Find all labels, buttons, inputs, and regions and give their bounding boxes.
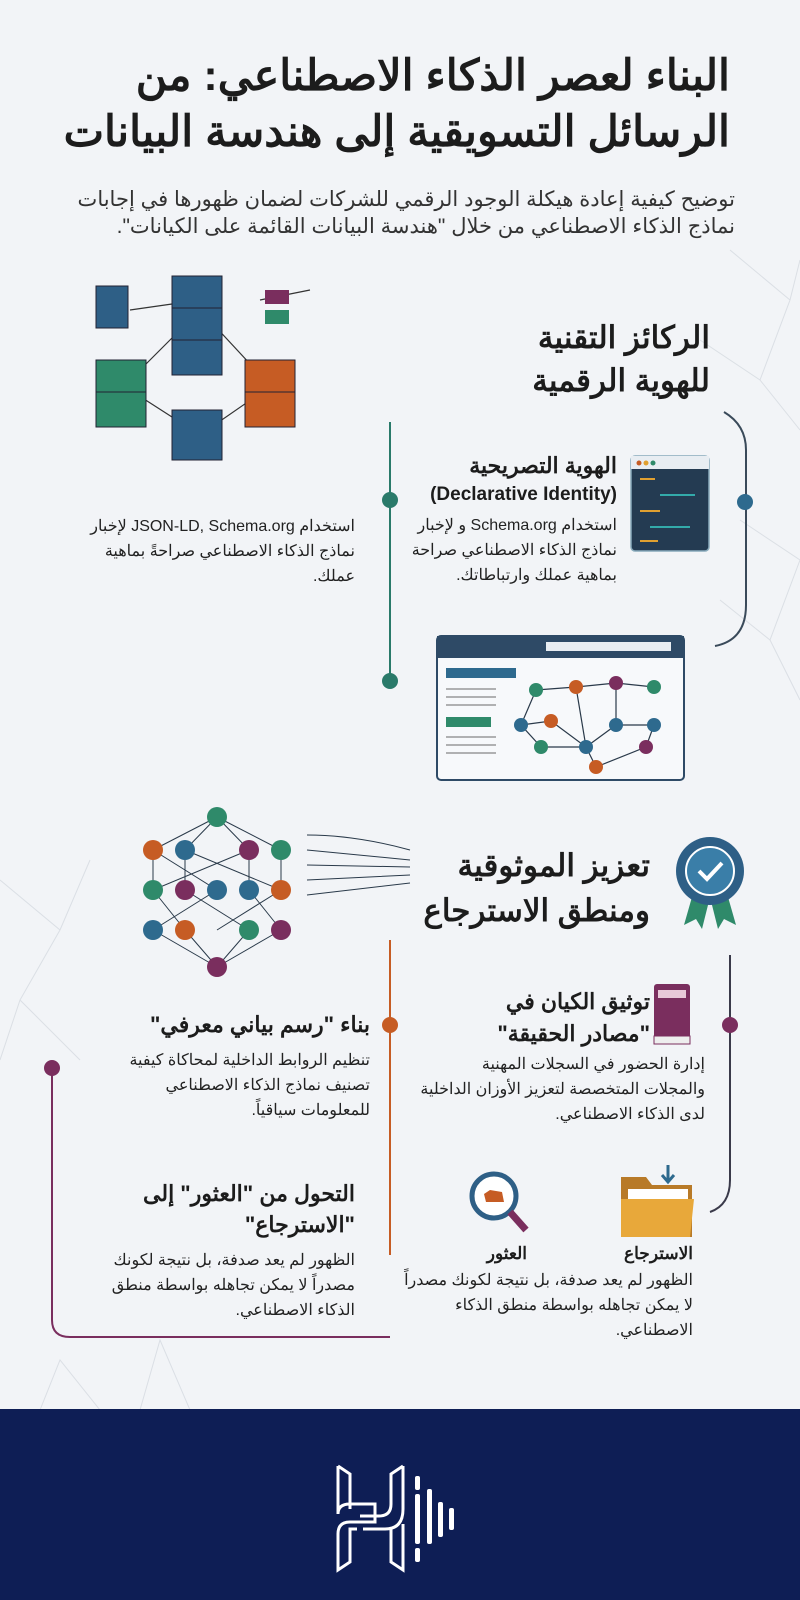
block: discovery to retrieval: التحول من "العثور" إلى bbox=[143, 1181, 355, 1206]
title: الرسائل التسويقية إلى هندسة البيانات bbox=[64, 108, 730, 156]
section 2 heading: ومنطق الاسترجاع bbox=[423, 893, 650, 928]
block: knowledge graph bbox=[129, 1012, 370, 1119]
footer band bbox=[0, 1409, 800, 1600]
icon: badge bbox=[676, 837, 744, 929]
label: retrieval: الاسترجاع bbox=[624, 1244, 693, 1263]
title bbox=[64, 52, 730, 158]
block: knowledge graph: تنظيم الروابط الداخلية لمحاكاة كيفية bbox=[129, 1052, 370, 1069]
text: retrieval body: الظهور لم يعد صدفة، بل نتيجة لكونك مصدراً bbox=[404, 1272, 693, 1289]
block: entity verification: "مصادر الحقيقة" bbox=[497, 1021, 650, 1046]
text block: left JSON-LD bbox=[90, 518, 355, 585]
block: discovery to retrieval bbox=[112, 1181, 355, 1319]
block: declarative identity: استخدام Schema.org و لإخبار bbox=[417, 517, 617, 534]
icon: book bbox=[654, 984, 690, 1044]
section 2 heading bbox=[423, 848, 650, 930]
subtitle: نماذج الذكاء الاصطناعي من خلال "هندسة البيانات القائمة على الكيانات". bbox=[117, 215, 735, 238]
icon: code window bbox=[630, 455, 710, 552]
illustration: browser knowledge graph bbox=[436, 635, 685, 781]
section 1 heading bbox=[532, 320, 710, 400]
logo bbox=[336, 1464, 454, 1573]
text: retrieval body: الاصطناعي. bbox=[616, 1322, 693, 1339]
illustration: server blocks bbox=[96, 276, 310, 460]
block: declarative identity: (Declarative Identity) bbox=[430, 484, 617, 505]
block: declarative identity: الهوية التصريحية bbox=[469, 453, 617, 478]
block: discovery to retrieval: الذكاء الاصطناعي. bbox=[236, 1302, 355, 1319]
title: البناء لعصر الذكاء الاصطناعي: من bbox=[136, 52, 730, 100]
icon: magnifier bbox=[470, 1172, 529, 1232]
subtitle bbox=[78, 188, 735, 238]
block: discovery to retrieval: مصدراً لا يمكن تجاهله بواسطة منطق bbox=[112, 1277, 355, 1294]
block: knowledge graph: للمعلومات سياقياً. bbox=[251, 1102, 370, 1119]
block: discovery to retrieval: الظهور لم يعد صدفة، بل نتيجة لكونك bbox=[114, 1252, 355, 1269]
timeline line: section 1 bbox=[382, 411, 753, 689]
text block: left JSON-LD: استخدام JSON-LD, Schema.org لإخبار bbox=[90, 518, 355, 535]
block: declarative identity: نماذج الذكاء الاصطناعي صراحة bbox=[412, 542, 617, 559]
block: declarative identity bbox=[412, 453, 617, 584]
text: entity verification body: إدارة الحضور في السجلات المهنية bbox=[482, 1056, 705, 1073]
timeline lines: section 2 bbox=[44, 940, 738, 1338]
block: entity verification: توثيق الكيان في bbox=[506, 989, 650, 1014]
text: entity verification body: والمجلات المتخصصة لتعزيز الأوزان الداخلية bbox=[420, 1081, 705, 1098]
section 2 heading: تعزيز الموثوقية bbox=[458, 848, 650, 883]
illustration: neural network bbox=[143, 807, 410, 977]
text: entity verification body bbox=[420, 1056, 705, 1123]
text: entity verification body: لدى الذكاء الاصطناعي. bbox=[555, 1106, 705, 1123]
block: declarative identity: بماهية عملك وارتباطاتك. bbox=[456, 567, 617, 584]
text block: left JSON-LD: نماذج الذكاء الاصطناعي صراحةً بماهية bbox=[105, 543, 355, 560]
section 1 heading: الركائز التقنية bbox=[538, 320, 710, 355]
section 1 heading: للهوية الرقمية bbox=[532, 363, 710, 398]
block: entity verification bbox=[497, 989, 650, 1047]
text: retrieval body: لا يمكن تجاهله بواسطة منطق الذكاء bbox=[455, 1297, 693, 1314]
block: knowledge graph: تصنيف نماذج الذكاء الاصطناعي bbox=[165, 1077, 370, 1094]
block: discovery to retrieval: "الاسترجاع" bbox=[245, 1212, 355, 1237]
label: discovery: العثور bbox=[487, 1244, 527, 1263]
icon: folder bbox=[621, 1165, 694, 1237]
subtitle: توضيح كيفية إعادة هيكلة الوجود الرقمي للشركات لضمان ظهورها في إجابات bbox=[78, 188, 735, 211]
text block: left JSON-LD: عملك. bbox=[313, 568, 355, 585]
text: retrieval body bbox=[404, 1268, 693, 1339]
block: knowledge graph: بناء "رسم بياني معرفي" bbox=[150, 1012, 370, 1037]
